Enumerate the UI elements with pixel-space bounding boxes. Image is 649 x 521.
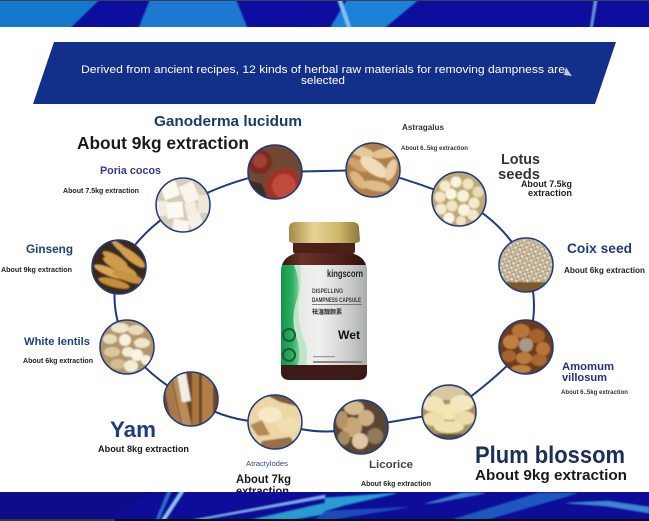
icon ring: Ginseng bbox=[92, 240, 146, 294]
label: Coix seed: About 6kg extraction bbox=[564, 266, 645, 275]
icon: Atractylodes bbox=[248, 396, 302, 448]
bottle label text: DISPELLING bbox=[312, 288, 343, 295]
bottom decorative band bbox=[0, 492, 649, 521]
banner: Derived from ancient recipes, 12 kinds of herbal raw materials for removing dampness are bbox=[81, 64, 565, 76]
bottle label text: Wet bbox=[338, 328, 360, 342]
icon: Licorice bbox=[334, 400, 388, 454]
label: Astragalus: Astragalus bbox=[402, 123, 445, 132]
label: Amomum villosum: About 6..5kg extraction bbox=[561, 389, 628, 396]
bottle neck bbox=[293, 240, 355, 254]
label: Ganoderma lucidum: Ganoderma lucidum bbox=[154, 113, 302, 130]
label: Yam bbox=[98, 417, 189, 454]
label: White lentils: About 6kg extraction bbox=[23, 358, 93, 365]
bottle label text: 祛湿靓颜素 bbox=[312, 308, 342, 316]
icon ring: Ganoderma lucidum bbox=[248, 145, 302, 199]
icon ring: Yam bbox=[164, 372, 218, 426]
label: Poria cocos bbox=[63, 165, 161, 195]
label: White lentils: White lentils bbox=[24, 336, 90, 348]
banner bbox=[33, 42, 616, 104]
bottle label text: DAMPNESS CAPSULE bbox=[312, 298, 361, 304]
label: White lentils bbox=[23, 336, 93, 365]
icon: Astragalus bbox=[346, 144, 400, 196]
label: Ganoderma lucidum: About 9kg extraction bbox=[77, 133, 249, 153]
label: Astragalus: About 6..5kg extraction bbox=[401, 145, 468, 152]
bottle label text bbox=[312, 268, 363, 363]
label: Lotus seeds: About 7.5kg bbox=[521, 179, 572, 189]
bottle body bbox=[281, 250, 367, 382]
icon: Ginseng bbox=[92, 240, 146, 294]
label: Licorice: About 6kg extraction bbox=[361, 481, 431, 488]
icon: Amomum villosum bbox=[500, 320, 552, 374]
label: Lotus seeds: Lotus bbox=[501, 152, 540, 168]
bottle label text: kingscorn bbox=[327, 268, 363, 280]
label: Licorice: Licorice bbox=[369, 459, 413, 471]
bottle bbox=[281, 222, 367, 382]
label: Lotus seeds: seeds bbox=[498, 167, 540, 183]
banner: selected bbox=[301, 75, 345, 87]
connecting ring bbox=[114, 170, 534, 431]
icon ring: Coix seed bbox=[499, 238, 553, 292]
label: Lotus seeds bbox=[498, 152, 572, 198]
label: Yam: Yam bbox=[110, 417, 156, 442]
label: Plum blossom: About 9kg extraction bbox=[475, 467, 627, 484]
label: Coix seed bbox=[564, 240, 645, 275]
icon: Yam bbox=[164, 372, 218, 426]
icon ring: Lotus seeds bbox=[432, 172, 486, 226]
label: Licorice bbox=[361, 459, 431, 488]
icon ring: Amomum villosum bbox=[499, 320, 553, 374]
icon ring: Plum blossom bbox=[422, 385, 476, 439]
label: Amomum villosum bbox=[561, 361, 628, 396]
label: Ginseng: About 9kg extraction bbox=[1, 267, 72, 274]
icon: Ganoderma lucidum bbox=[248, 146, 302, 198]
label: Atractylodes: Atractylodes bbox=[246, 461, 289, 468]
label: Poria cocos: About 7.5kg extraction bbox=[63, 188, 139, 195]
top decorative band bbox=[0, 0, 649, 30]
label: Coix seed: Coix seed bbox=[567, 240, 632, 256]
label: Yam: About 8kg extraction bbox=[98, 444, 189, 454]
icon: Lotus seeds bbox=[432, 172, 486, 226]
icon ring: Licorice bbox=[334, 400, 388, 454]
icon: Coix seed bbox=[500, 238, 552, 292]
label: Atractylodes bbox=[236, 461, 291, 498]
label: Ginseng bbox=[1, 242, 73, 274]
label: Atractylodes: About 7kg bbox=[236, 472, 291, 486]
label: Astragalus bbox=[401, 123, 468, 152]
icon ring: Atractylodes bbox=[248, 395, 302, 449]
label: Atractylodes: extraction bbox=[236, 484, 289, 498]
label: Amomum villosum: villosum bbox=[562, 372, 607, 384]
label: Poria cocos: Poria cocos bbox=[100, 165, 161, 177]
icon ring: Poria cocos bbox=[156, 178, 210, 232]
label: Ginseng: Ginseng bbox=[26, 242, 73, 256]
label: Plum blossom: Plum blossom bbox=[475, 442, 625, 469]
icon: Poria cocos bbox=[156, 178, 210, 232]
bottle cap bbox=[289, 222, 360, 243]
icon: White lentils bbox=[100, 320, 154, 374]
label: Ganoderma lucidum bbox=[77, 113, 302, 153]
icon: Plum blossom bbox=[422, 386, 476, 438]
icon ring: White lentils bbox=[100, 320, 154, 374]
label: Plum blossom bbox=[475, 442, 627, 484]
label: Amomum villosum: Amomum bbox=[562, 361, 614, 373]
label: Lotus seeds: extraction bbox=[528, 188, 572, 198]
icon ring: Astragalus bbox=[346, 143, 400, 197]
